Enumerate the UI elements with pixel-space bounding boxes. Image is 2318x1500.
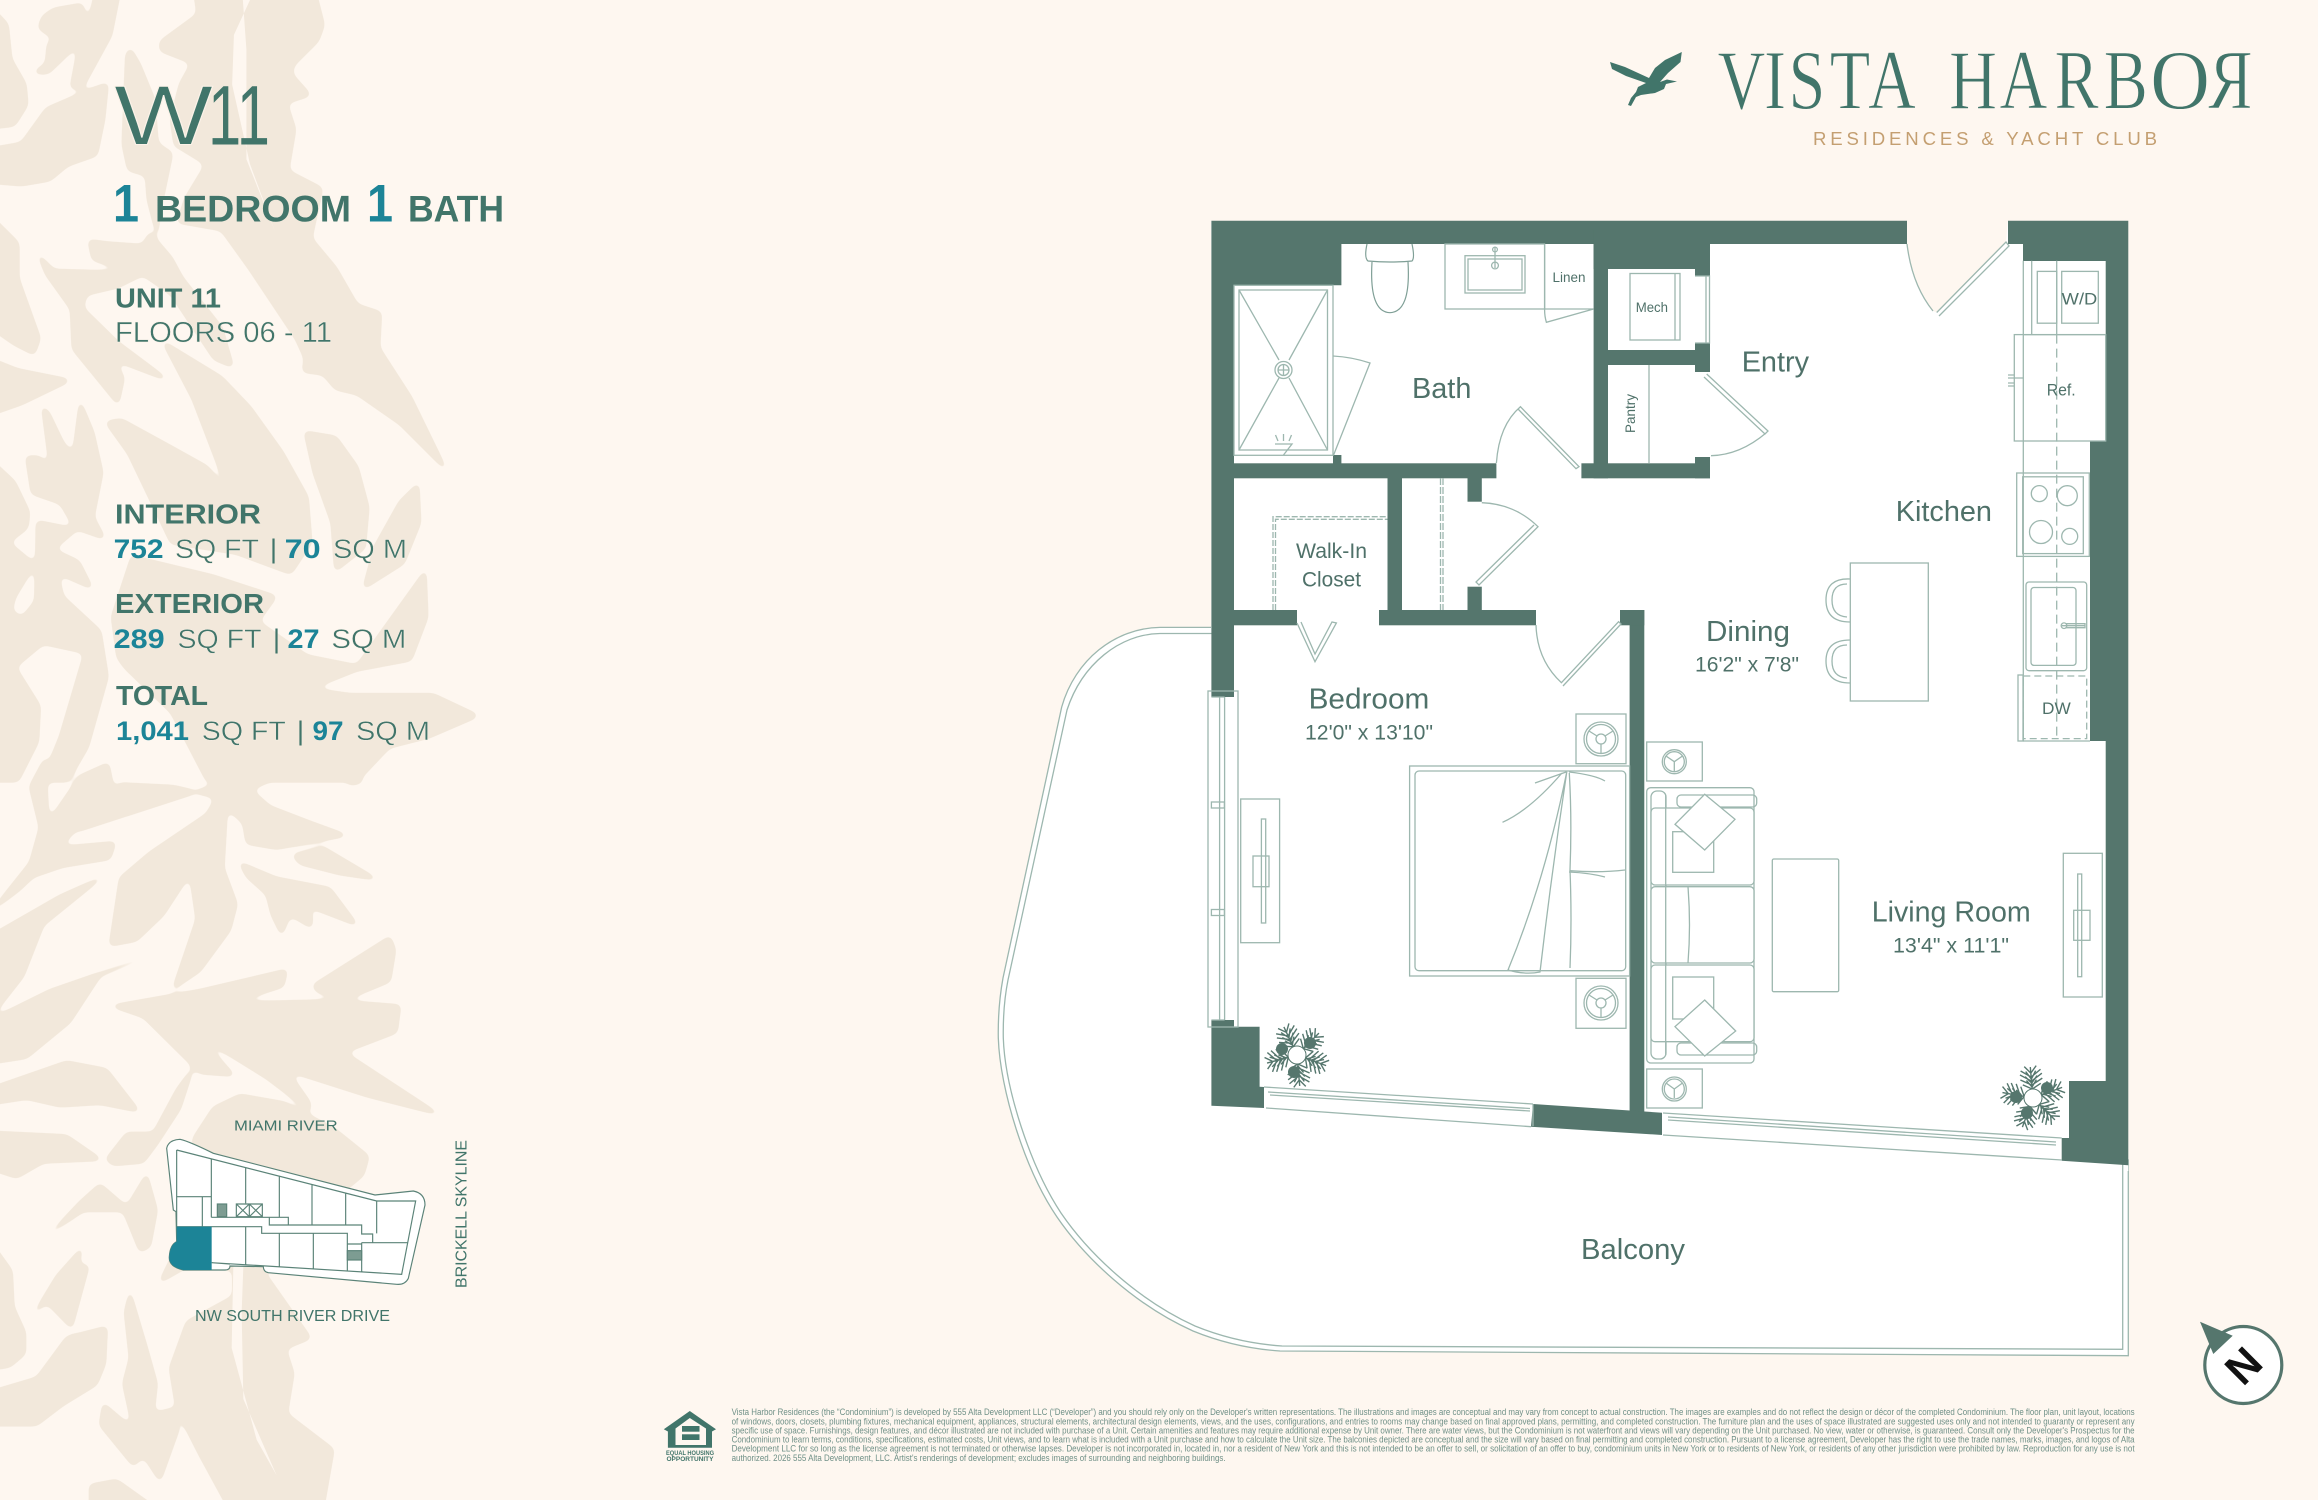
room labels: Kitchen [1896,496,1992,528]
room labels: 13'4" x 11'1" [1893,934,2009,957]
legal disclaimer: authorized. 2026 555 Alta Development, LLC. Artist's renderings of development; excludes images of surrounding and neighboring buildings. [732,1453,1226,1463]
room labels: 12'0" x 13'10" [1305,721,1433,744]
bed [1410,766,1630,976]
room labels: Ref. [2047,381,2076,400]
north compass [2200,1322,2282,1404]
living side tables [1647,742,1702,1108]
subtitle: bed and bath count: BEDROOM [155,188,351,229]
logo [1610,34,2252,149]
icon: plant bedroom [1263,1021,1331,1088]
subtitle: bed and bath count: BATH [408,188,504,229]
room labels: 16'2" x 7'8" [1695,653,1799,676]
exterior area: SQ FT [178,624,262,654]
legal disclaimer: Vista Harbor Residences (the “Condominium”) is developed by 555 Alta Development LLC (“Developer”) and you should rely only on the Developer's written representations. The illustrations and images are conceptual and may vary from concept to actual construction. The images are examples and do not reflect the design or décor of the completed Condominium. The floor plan, unit layout, locations [732,1407,2135,1417]
shower [1234,285,1370,455]
label: Brickell Skyline: BRICKELL SKYLINE [454,1140,471,1288]
interior area: 70 [285,534,321,564]
room labels: Mech [1636,299,1668,315]
total area: SQ FT [202,716,286,746]
subtitle: bed and bath count: 1 [367,174,393,233]
room labels: Entry [1742,346,1809,378]
interior area: SQ M [333,534,407,564]
dining island and stools [1826,563,1928,701]
doors [1273,242,2009,686]
legal disclaimer: specific use of space. Furnishings, design features, and décor illustrated are not included with purchase of a Unit. Certain amenities and features may require additional expense by Unit owner. There are water views, but the Condominium is not waterfront and views will vary depending on the Unit purchased. No view, water or otherwise, is guaranteed. Consult only the Developer's Prospectus for the [732,1425,2135,1435]
bedroom tv console [1241,799,1280,943]
room labels: Bath [1412,373,1471,405]
legal disclaimer [732,1407,2135,1463]
label: NW South River Drive: NW SOUTH RIVER DRIVE [195,1308,390,1325]
room labels: Linen [1552,270,1586,285]
title: unit name [114,68,270,162]
toilet [1366,244,1414,313]
highlighted unit [169,1227,212,1270]
exterior area: 27 [288,624,320,654]
room labels: Walk-In [1296,539,1367,563]
icon: equal housing opportunity [664,1411,716,1463]
living windows [1663,1113,2062,1160]
balcony slab [998,221,2128,1356]
walls [1211,221,2128,1165]
room labels: Balcony [1581,1234,1686,1266]
legal disclaimer: Development LLC for so long as the license agreement is not terminated or otherwise lapses. Developer is not incorporated in, located in, nor a resident of New York and this is not intended to be an offer to sell, or solicitation of an offer to buy, condominium units in New York or to residents of New York, or residents of any other jurisdiction were prohibited by law. Reproduction for any use is not [732,1444,2135,1454]
floor plan [998,218,2128,1356]
legal disclaimer: of windows, doors, closets, plumbing fixtures, mechanical equipment, appliances, structural elements, architectural design elements, views, and the uses, configurations, and entries to rooms may change based on final approved plans, permitting, and completed construction. The furniture plan and the uses of space illustrated are suggested uses only and not intended to guaranty or represent any [732,1416,2135,1426]
interior area: INTERIOR [115,498,261,529]
vanity and linen [1445,244,1594,322]
total area: 1,041 [116,716,189,746]
icon: plant living [2000,1065,2067,1132]
exterior area: SQ M [331,624,406,654]
room labels: Pantry [1622,394,1638,433]
title: unit name: W [114,68,213,162]
room labels: Living Room [1872,897,2031,929]
corridor notch at entry [1907,218,2008,312]
tagline: RESIDENCES & YACHT CLUB [1813,128,2157,149]
room labels: Closet [1302,568,1361,592]
sofa [1647,788,1757,1063]
icon: equal housing opportunity: EQUAL HOUSING [666,1451,714,1457]
exterior area: EXTERIOR [115,588,264,619]
north compass: N [2216,1338,2272,1394]
room labels [1296,270,2097,1266]
unit and floors: FLOORS 06 - 11 [115,317,332,349]
total area: SQ M [356,716,430,746]
room labels: Bedroom [1309,683,1429,715]
mech unit [1630,274,1680,340]
exterior area: | [273,624,280,654]
total area [116,680,430,746]
subtitle: bed and bath count: 1 [113,174,139,233]
key plan outline [167,1139,425,1284]
room labels: W/D [2062,289,2097,308]
nightstands [1576,714,1626,1028]
interior area [114,498,407,564]
label: Miami River: MIAMI RIVER [234,1118,338,1135]
unit and floors: UNIT 11 [115,282,221,314]
wordmark: R [2208,34,2252,128]
interior area: SQ FT [175,534,259,564]
building key plan [167,1118,471,1325]
subtitle: bed and bath count [113,174,504,233]
total area: 97 [312,716,344,746]
kitchen appliances [2008,261,2106,741]
coffee table [1772,859,1839,992]
decorative leaf pattern [0,0,477,1500]
room labels: Dining [1706,616,1790,648]
unit and floors [115,282,332,349]
total area: | [297,716,304,746]
icon: heron [1610,52,1682,106]
room labels: DW [2042,699,2071,718]
icon: equal housing opportunity: OPPORTUNITY [666,1457,714,1463]
bedroom windows [1208,691,1533,1127]
exterior area [114,588,406,654]
wordmark: O [2150,34,2210,128]
living tv console [2063,853,2102,997]
exterior area: 289 [114,624,165,654]
interior area: 752 [114,534,164,564]
legal disclaimer: Condominium to learn terms, conditions, specifications, estimated costs, Unit views, and to learn what is included with a Unit purchase and how to calculate the Unit size. The balconies depicted are conceptual and the size will vary based on final permitting and completed construction. Pursuant to a license agreement, Developer has the right to use the trade names, marks, images, and logos of Alta [732,1435,2135,1445]
wordmark: VISTA HARB [1718,34,2148,128]
title: unit name: 11 [208,68,270,162]
total area: TOTAL [116,680,208,711]
interior area: | [270,534,277,564]
